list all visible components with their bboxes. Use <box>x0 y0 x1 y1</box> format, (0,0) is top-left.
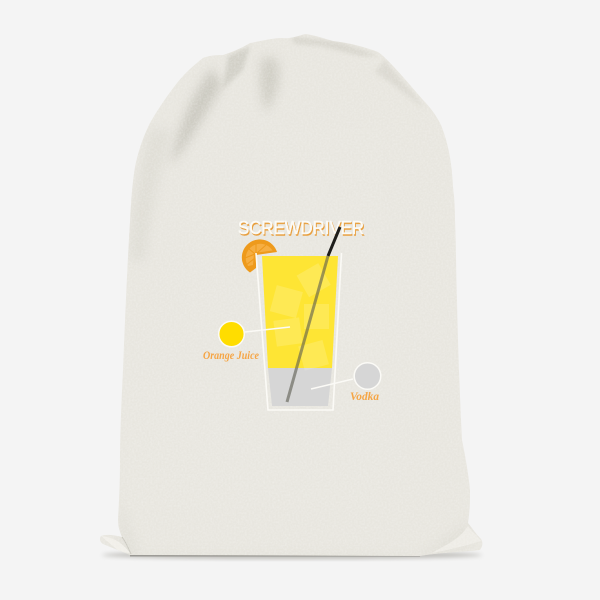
callout: vodka: Vodka <box>350 391 379 403</box>
bag shadow <box>102 551 482 559</box>
fabric texture <box>126 40 386 554</box>
orange juice layer <box>262 256 338 368</box>
cotton sack <box>90 25 490 565</box>
callout: vodka <box>311 363 381 403</box>
sack shading and folds <box>102 36 416 554</box>
cocktail design <box>203 217 381 410</box>
straw <box>287 227 340 402</box>
ice cubes <box>270 263 331 371</box>
vodka layer <box>268 368 332 406</box>
glass outline <box>256 253 342 410</box>
icon: orange slice <box>242 239 277 272</box>
title: SCREWDRIVER <box>239 218 365 240</box>
callout: orange juice <box>203 321 290 362</box>
glass <box>256 253 342 410</box>
title: SCREWDRIVER <box>238 217 364 238</box>
callout: orange juice: Orange Juice <box>203 350 259 362</box>
